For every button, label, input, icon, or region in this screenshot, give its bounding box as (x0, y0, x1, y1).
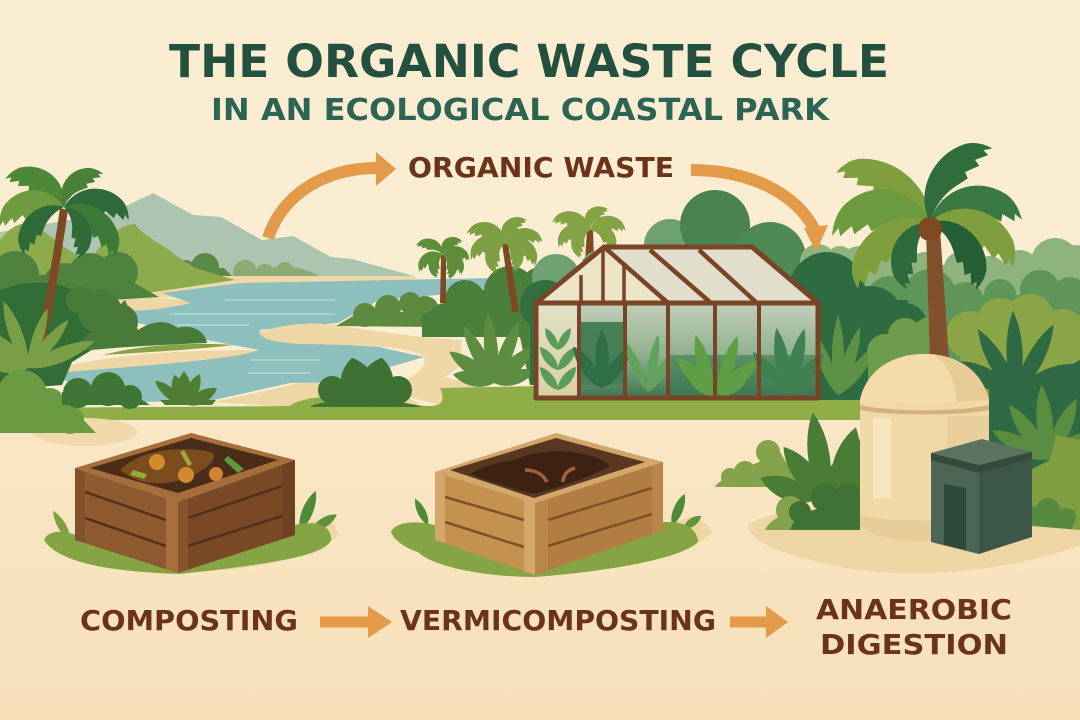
far sand strip (126, 276, 420, 298)
green box (931, 439, 1032, 554)
posts (75, 468, 85, 543)
mid trees (860, 269, 1080, 395)
subtitle: IN AN ECOLOGICAL COASTAL PARK (211, 93, 831, 128)
left jungle (0, 224, 235, 390)
right jungle (789, 238, 1080, 530)
dark shrub by water (62, 372, 150, 409)
plant by water (152, 371, 220, 410)
sand shadow for digester (748, 509, 1080, 573)
plants inside (536, 326, 580, 393)
icon: left palm (0, 154, 132, 340)
third small palm (552, 201, 626, 262)
planks (445, 488, 652, 547)
highlight (873, 418, 891, 498)
arrow: composting to vermicomposting (320, 606, 392, 638)
label: organic waste: ORGANIC WASTE (408, 151, 674, 184)
trees behind greenhouse (520, 190, 806, 385)
front lighter leaves right (989, 384, 1080, 468)
olive lower right (1030, 435, 1080, 530)
bushes left of tank (715, 411, 869, 530)
mountains (0, 193, 414, 290)
label: composting: COMPOSTING (80, 604, 298, 637)
sand patch under front bush (33, 418, 137, 446)
arrow: up to organic waste (268, 152, 396, 238)
green bushes (0, 251, 159, 380)
dark mass (0, 283, 108, 390)
dome (860, 354, 989, 404)
sand shore right (214, 324, 507, 408)
title: THE ORGANIC WASTE CYCLE (169, 35, 889, 88)
front panes (536, 303, 818, 398)
shore bushes (336, 266, 558, 385)
arrow: down from organic waste (691, 170, 828, 252)
band (860, 405, 989, 414)
central shrub foreground (310, 354, 422, 408)
arrow: vermicomposting to digestion (730, 606, 788, 638)
vermicomposting bin (391, 433, 712, 577)
far shore trees (150, 253, 325, 284)
olive bush behind tank (867, 317, 948, 395)
icon: right large palm (832, 128, 1027, 360)
ground shadow (545, 516, 712, 574)
rim (435, 433, 663, 503)
dark leaves right (953, 311, 1080, 500)
fern right of greenhouse (806, 315, 882, 399)
posts (435, 472, 445, 543)
contents (90, 438, 278, 493)
grass blades (411, 492, 704, 531)
right front (178, 460, 295, 573)
rim (75, 433, 295, 502)
left front (75, 468, 178, 573)
grass band (0, 386, 880, 420)
olive hill (0, 224, 235, 300)
label: vermicomposting: VERMICOMPOSTING (400, 604, 716, 637)
grass mat (44, 523, 331, 574)
plant left of greenhouse (445, 311, 540, 390)
label: anaerobic digestion: ANAEROBIC (816, 593, 1012, 626)
anaerobic digester (860, 354, 1032, 554)
grass mat (391, 522, 698, 577)
soil (450, 438, 645, 498)
small palms (414, 211, 544, 312)
greenhouse (536, 247, 830, 402)
frame (536, 247, 818, 398)
ground shadow (190, 518, 338, 572)
label: anaerobic digestion (816, 593, 1012, 661)
front-left bush (0, 370, 96, 434)
composting bin (44, 433, 339, 574)
planks (85, 486, 282, 546)
tank body (860, 354, 989, 541)
label: anaerobic digestion: DIGESTION (820, 628, 1008, 661)
right front (535, 462, 663, 575)
grass blades (50, 489, 339, 542)
gable glass (536, 247, 668, 303)
olive scalloped bush right (946, 294, 1080, 430)
lagoon water (62, 278, 495, 402)
roof glass (604, 247, 818, 303)
left front (435, 472, 535, 575)
sand spits left (66, 297, 259, 372)
fern left (0, 299, 97, 377)
mid bush (66, 286, 207, 352)
sand ground (0, 415, 1080, 720)
grass spit (103, 344, 234, 355)
